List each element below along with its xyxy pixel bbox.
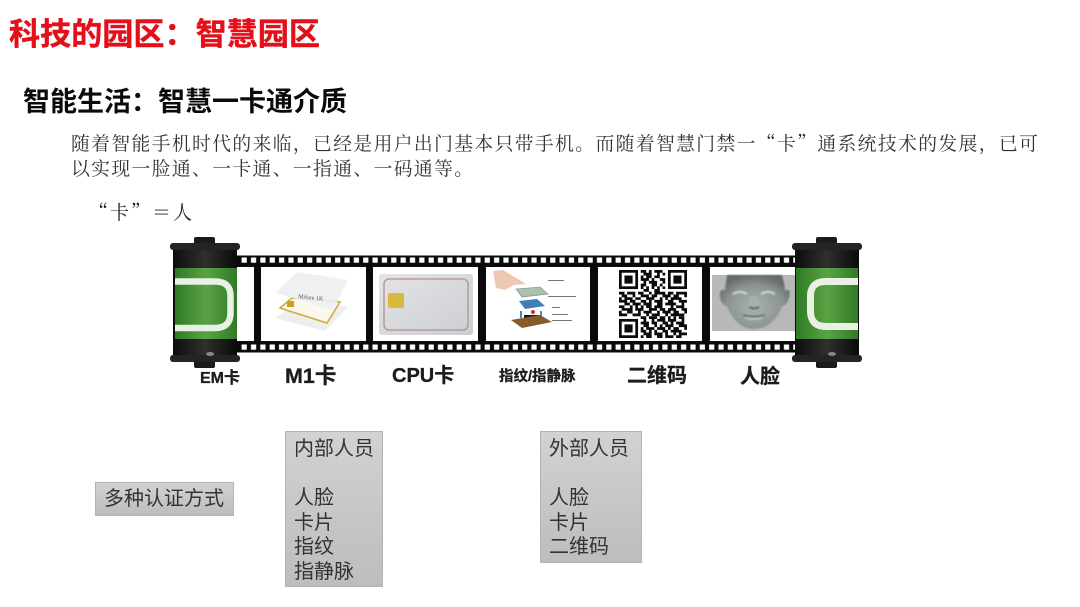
label: fingerprint and finger vein: 指纹/指静脉: [499, 369, 576, 385]
frame: M1 card: Mifare 1K: [298, 293, 324, 303]
frame: M1 card: [261, 267, 366, 341]
subheading: 智能生活：智慧一卡通介质: [23, 87, 347, 117]
box: external visitors: [540, 431, 642, 563]
frame: fingerprint module: [486, 267, 590, 341]
box: authentication methods: [95, 482, 234, 516]
right film canister: [792, 237, 862, 368]
box: external visitors: 二维码: [549, 536, 609, 558]
box: internal staff: 内部人员: [294, 438, 374, 460]
box: external visitors: 人脸: [549, 487, 589, 509]
box: internal staff: [285, 431, 383, 587]
title: 科技的园区：智慧园区: [9, 17, 320, 52]
label: EM card: EM卡: [200, 370, 240, 387]
frame: QR code: [598, 267, 702, 341]
left film canister: [170, 237, 240, 368]
intro paragraph: [71, 129, 1039, 181]
label: QR code: 二维码: [627, 365, 687, 387]
box: internal staff: 人脸: [294, 487, 334, 509]
box: internal staff: 指静脉: [294, 560, 354, 582]
film band: [235, 256, 800, 352]
box: external visitors: 卡片: [549, 512, 589, 534]
box: authentication methods: 多种认证方式: [104, 488, 224, 510]
frame: CPU card: [373, 267, 478, 341]
equation label: “卡”＝人: [89, 198, 194, 225]
intro paragraph: 以实现一脸通、一卡通、一指通、一码通等。: [71, 154, 474, 181]
intro paragraph: 随着智能手机时代的来临，已经是用户出门基本只带手机。而随着智慧门禁一“卡”通系统技术的发展，已可: [71, 129, 1039, 156]
box: internal staff: 指纹: [294, 536, 334, 558]
label: CPU card: CPU卡: [392, 365, 454, 387]
label: face: 人脸: [740, 366, 780, 388]
box: internal staff: 卡片: [294, 512, 334, 534]
label: M1 card: M1卡: [285, 364, 336, 388]
frame: EM card: [236, 267, 254, 341]
frame: face scan: [710, 267, 800, 341]
box: external visitors: 外部人员: [549, 438, 629, 460]
